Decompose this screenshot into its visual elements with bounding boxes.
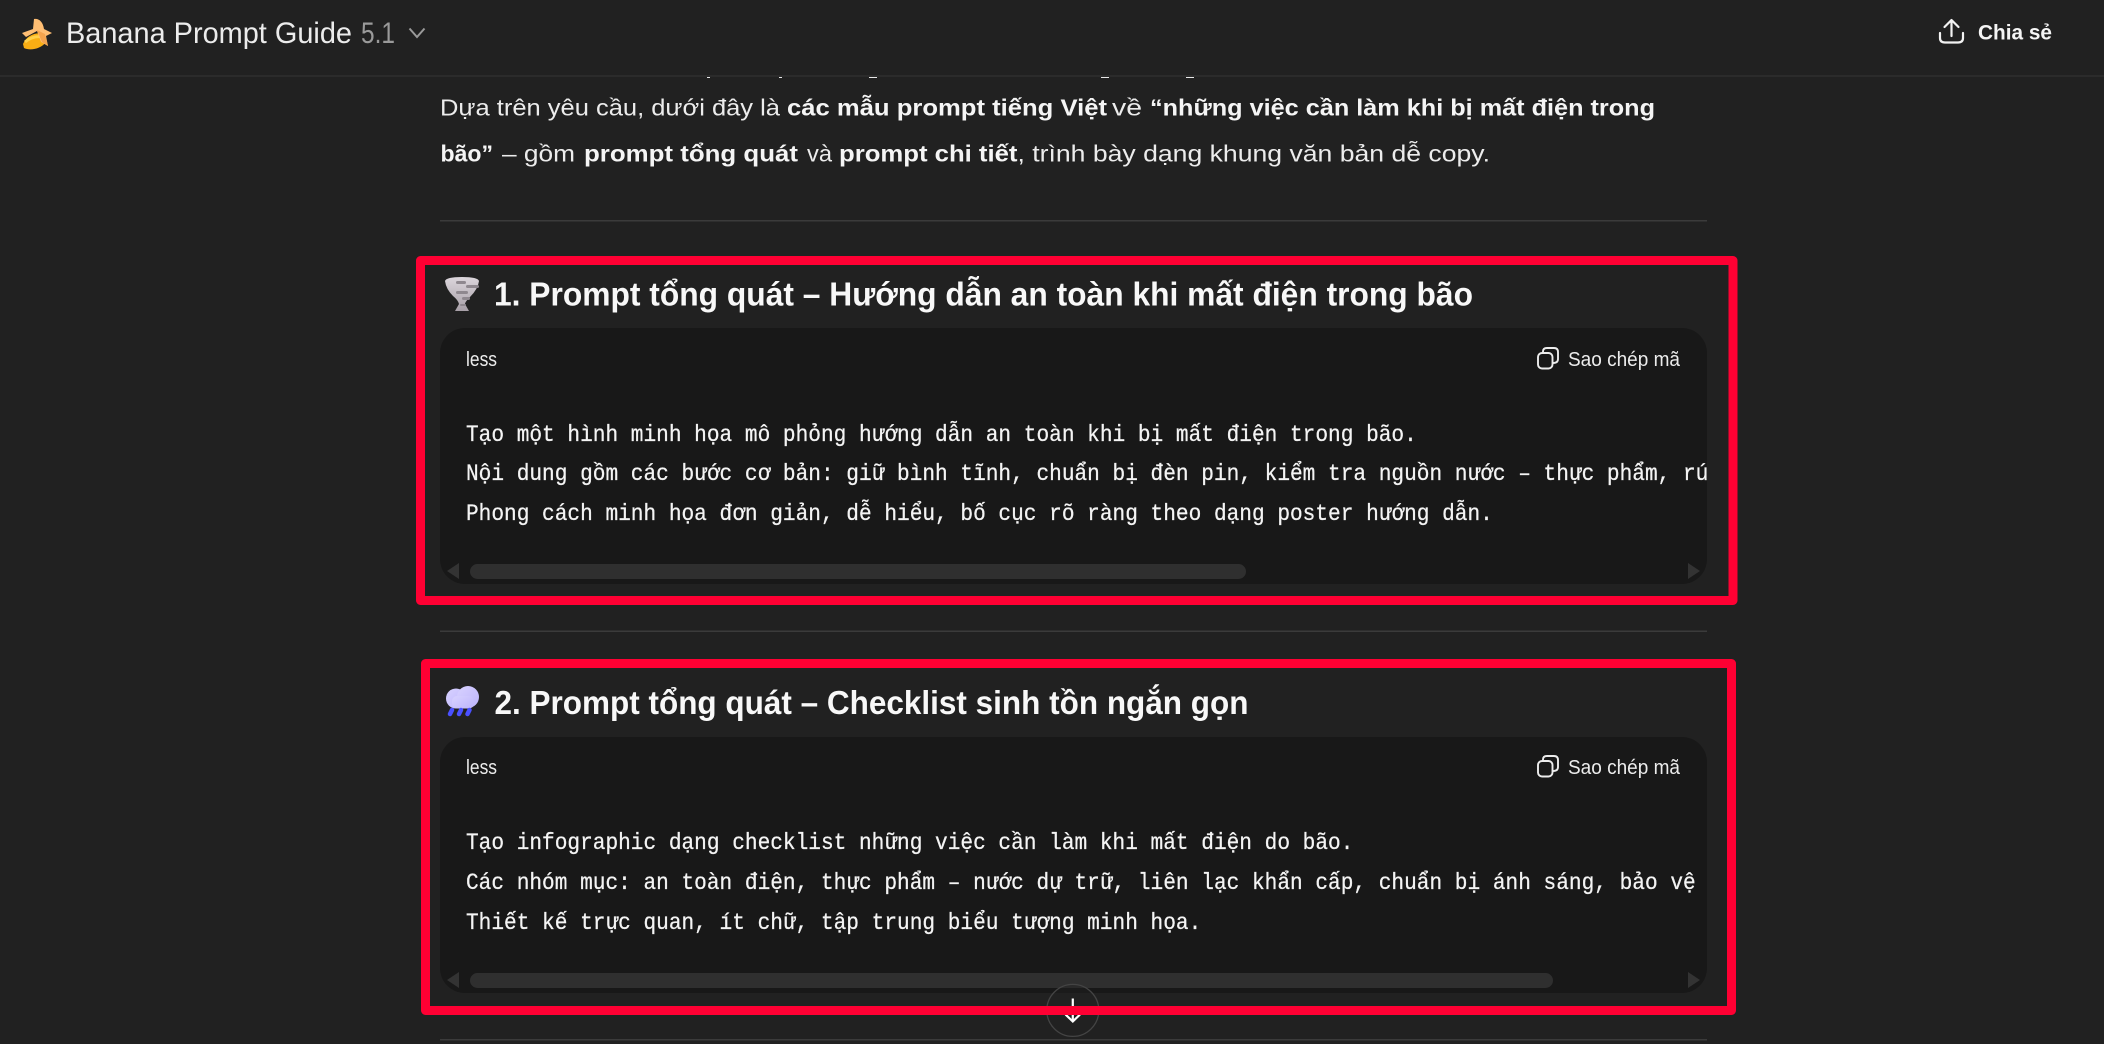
code text: Nội dung gồm các bước cơ bản: giữ bình tĩnh, chuẩn bị đèn pin, kiểm tra nguồn nước – thực phẩm, rút [466,461,1721,487]
language label: less [466,757,497,779]
code text: Các nhóm mục: an toàn điện, thực phẩm – nước dự trữ, liên lạc khẩn cấp, chuẩn bị ánh sáng, bảo vệ [466,870,1696,896]
code text: Thiết kế trực quan, ít chữ, tập trung biểu tượng minh họa. [466,910,1201,936]
callout: red box 1 [420,260,1733,600]
intro paragraph: về [1112,95,1142,121]
scroll down button [1047,984,1099,1036]
panel: prompt 1 [440,276,1721,584]
code text [466,830,1696,936]
code block 1 [440,328,1721,584]
scrollbar [447,563,1700,579]
intro paragraph: prompt tổng quát [584,141,798,167]
icon: copy [1538,348,1558,368]
intro paragraph: , trình bày dạng khung văn bản dễ copy. [1018,141,1490,167]
code text: Phong cách minh họa đơn giản, dễ hiểu, bố cục rõ ràng theo dạng poster hướng dẫn. [466,499,1493,527]
language label: less [466,349,497,371]
copy label: Sao chép mã [1568,349,1681,371]
intro paragraph: “những việc cần làm khi bị mất điện trong [1150,95,1655,121]
clipped heading remnants under the top bar [707,76,1194,78]
heading 1: 1. Prompt tổng quát – Hướng dẫn an toàn khi mất điện trong bão [494,276,1473,313]
icon: copy [1538,756,1558,776]
intro paragraph: các mẫu prompt tiếng Việt [787,94,1107,121]
code text: Tạo infographic dạng checklist những việc cần làm khi mất điện do bão. [466,830,1353,856]
copy label: Sao chép mã [1568,757,1681,779]
divider 1 [440,220,1707,222]
icon: chevron [410,28,424,37]
divider 2 [440,630,1707,632]
app title: Banana Prompt Guide [66,17,352,50]
intro paragraph: bão” [440,141,493,167]
intro paragraph: Dựa trên yêu cầu, dưới đây là [440,95,780,121]
code block 2 [440,737,1707,993]
intro paragraph: – gồm [502,141,575,167]
icon: rain cloud [446,686,479,714]
code text: Tạo một hình minh họa mô phỏng hướng dẫn an toàn khi bị mất điện trong bão. [466,420,1417,448]
code text [466,420,1721,527]
top navigation bar [0,0,2104,77]
intro paragraph: prompt chi tiết [839,141,1018,167]
divider 3 [440,1039,1707,1040]
icon: share [1940,20,1963,42]
icon: banana [22,19,52,49]
callout: red box 2 [426,664,1732,1010]
share label: Chia sẻ [1978,22,2052,44]
panel: prompt 2 [440,684,1707,993]
intro paragraph [440,94,1655,167]
scrollbar [447,972,1700,988]
icon: tornado [445,277,479,311]
intro paragraph: và [807,141,832,167]
version label: 5.1 [361,17,395,50]
heading 2: 2. Prompt tổng quát – Checklist sinh tồn ngắn gọn [494,684,1248,721]
